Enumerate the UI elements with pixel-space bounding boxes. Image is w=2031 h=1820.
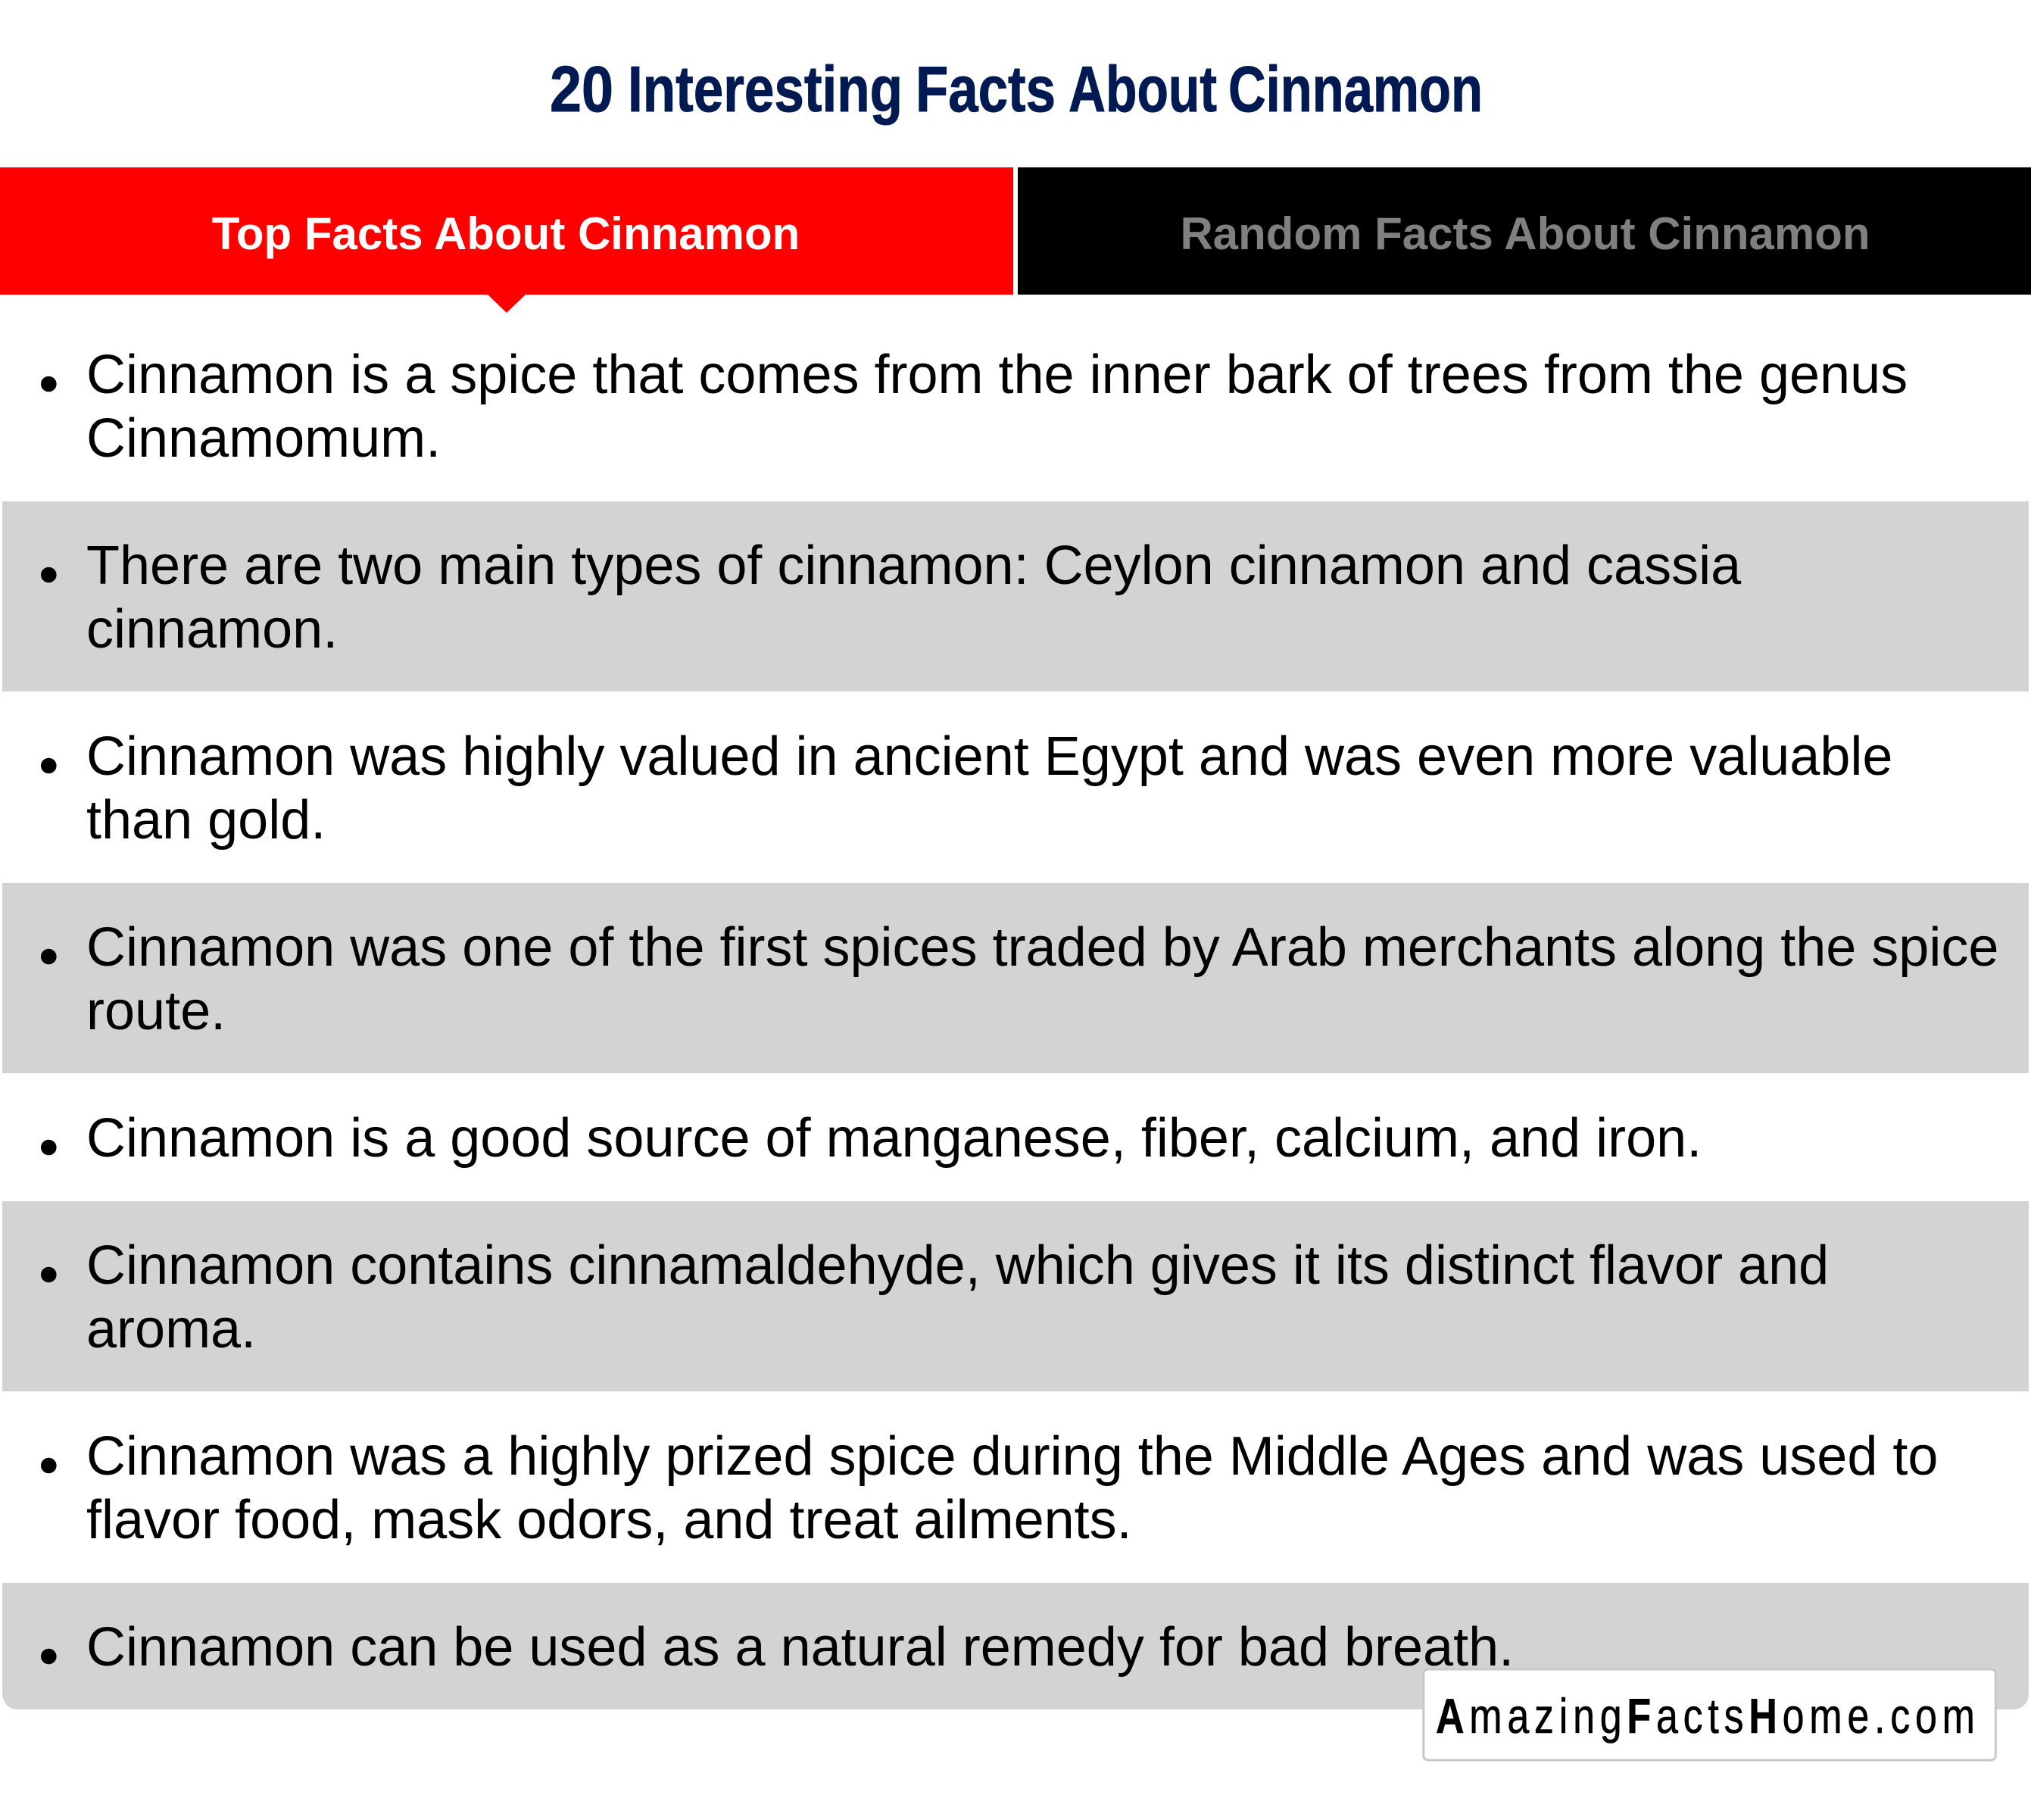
fact 2: cinnamon.: [86, 599, 338, 660]
active tab: top facts: [0, 167, 1013, 313]
title: Cinnamon: [1228, 54, 1483, 126]
title: [550, 54, 1483, 126]
fact 2: There are two main types of cinnamon: Ceylon cinnamon and cassia: [86, 535, 1742, 596]
inactive tab: random facts: Random Facts About Cinnamon: [1180, 208, 1870, 259]
fact 8: Cinnamon can be used as a natural remedy for bad breath.: [86, 1617, 1514, 1678]
title: Interesting: [628, 54, 903, 126]
fact 7: [41, 1426, 1938, 1550]
fact 2: [2, 501, 2029, 691]
watermark: AmazingFactsHome.com: AmazingFactsHome.com: [1436, 1690, 1975, 1744]
fact 1: [41, 345, 1908, 469]
fact 1: Cinnamon is a spice that comes from the inner bark of trees from the genus: [86, 345, 1908, 405]
fact 3: Cinnamon was highly valued in ancient Egypt and was even more valuable: [86, 726, 1892, 787]
fact 1: Cinnamomum.: [86, 408, 441, 469]
fact 6: aroma.: [86, 1299, 256, 1360]
fact 5: Cinnamon is a good source of manganese, fiber, calcium, and iron.: [86, 1108, 1702, 1169]
title: 20: [550, 54, 613, 126]
fact 3: than gold.: [86, 790, 326, 851]
fact 4: Cinnamon was one of the first spices traded by Arab merchants along the spice: [86, 917, 1998, 978]
title: Facts: [916, 54, 1056, 126]
fact 7: Cinnamon was a highly prized spice during the Middle Ages and was used to: [86, 1426, 1938, 1487]
fact 4: [2, 883, 2029, 1073]
active tab: top facts: Top Facts About Cinnamon: [212, 208, 800, 259]
fact 4: route.: [86, 981, 226, 1041]
title: About: [1069, 54, 1217, 126]
inactive tab: random facts: [1018, 167, 2031, 295]
fact 7: flavor food, mask odors, and treat ailments.: [86, 1490, 1132, 1550]
fact 6: [2, 1201, 2029, 1391]
fact 8: [2, 1583, 2029, 1709]
watermark: AmazingFactsHome.com: [1424, 1669, 1995, 1760]
fact 3: [41, 726, 1892, 851]
fact 6: Cinnamon contains cinnamaldehyde, which gives it its distinct flavor and: [86, 1235, 1829, 1296]
